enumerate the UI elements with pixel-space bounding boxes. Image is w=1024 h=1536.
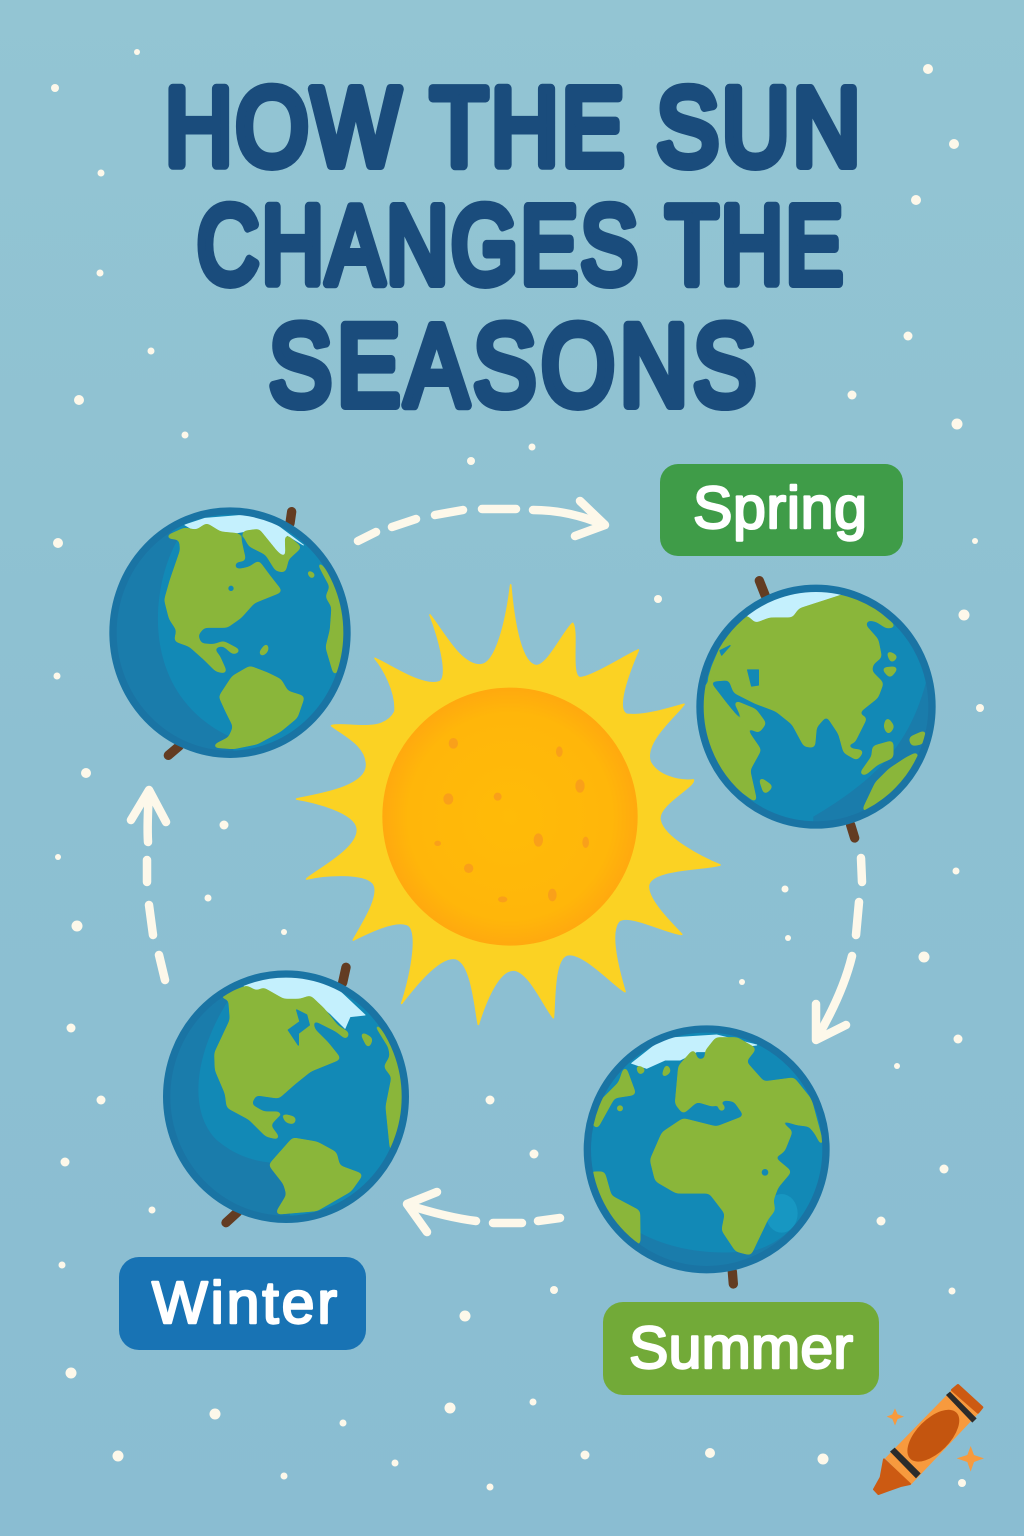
globe: bottom-right, Africa	[577, 1027, 833, 1284]
globe axis	[732, 1272, 733, 1284]
globe axis	[226, 967, 346, 1223]
globe: top-right, Asia	[698, 581, 940, 838]
globe rim	[587, 1029, 826, 1270]
globe axis	[168, 512, 292, 755]
label: Summer	[603, 1302, 879, 1395]
label: Spring: Spring	[693, 475, 867, 541]
globe rim	[113, 511, 347, 754]
label: Winter: Winter	[152, 1270, 337, 1336]
arrow: right, to Summer	[816, 858, 862, 1040]
sun disc	[382, 688, 638, 946]
title: SEASONS	[269, 302, 756, 430]
globe: top-left, Americas	[90, 509, 349, 760]
globe: bottom-left, Americas	[150, 967, 408, 1223]
label: Winter	[119, 1257, 366, 1350]
arrow: bottom, to Winter	[407, 1192, 560, 1232]
arrow: top, to Spring	[358, 501, 605, 541]
globe surface	[116, 515, 344, 750]
sun	[297, 585, 720, 1024]
icon: crayon	[874, 1385, 984, 1494]
title: HOW THE SUN	[165, 66, 860, 189]
globe surface	[704, 592, 928, 822]
sun spots	[434, 738, 589, 902]
arrow: left, to top globe	[131, 790, 166, 980]
sun rays	[297, 585, 720, 1024]
title	[165, 66, 860, 430]
label: Summer: Summer	[629, 1315, 853, 1381]
title: CHANGES THE	[197, 184, 843, 306]
label: Spring	[660, 464, 903, 556]
globe surface	[170, 978, 402, 1216]
globe surface	[593, 1034, 822, 1266]
globe axis	[759, 581, 855, 838]
globe rim	[700, 588, 932, 825]
globe rim	[167, 974, 405, 1219]
